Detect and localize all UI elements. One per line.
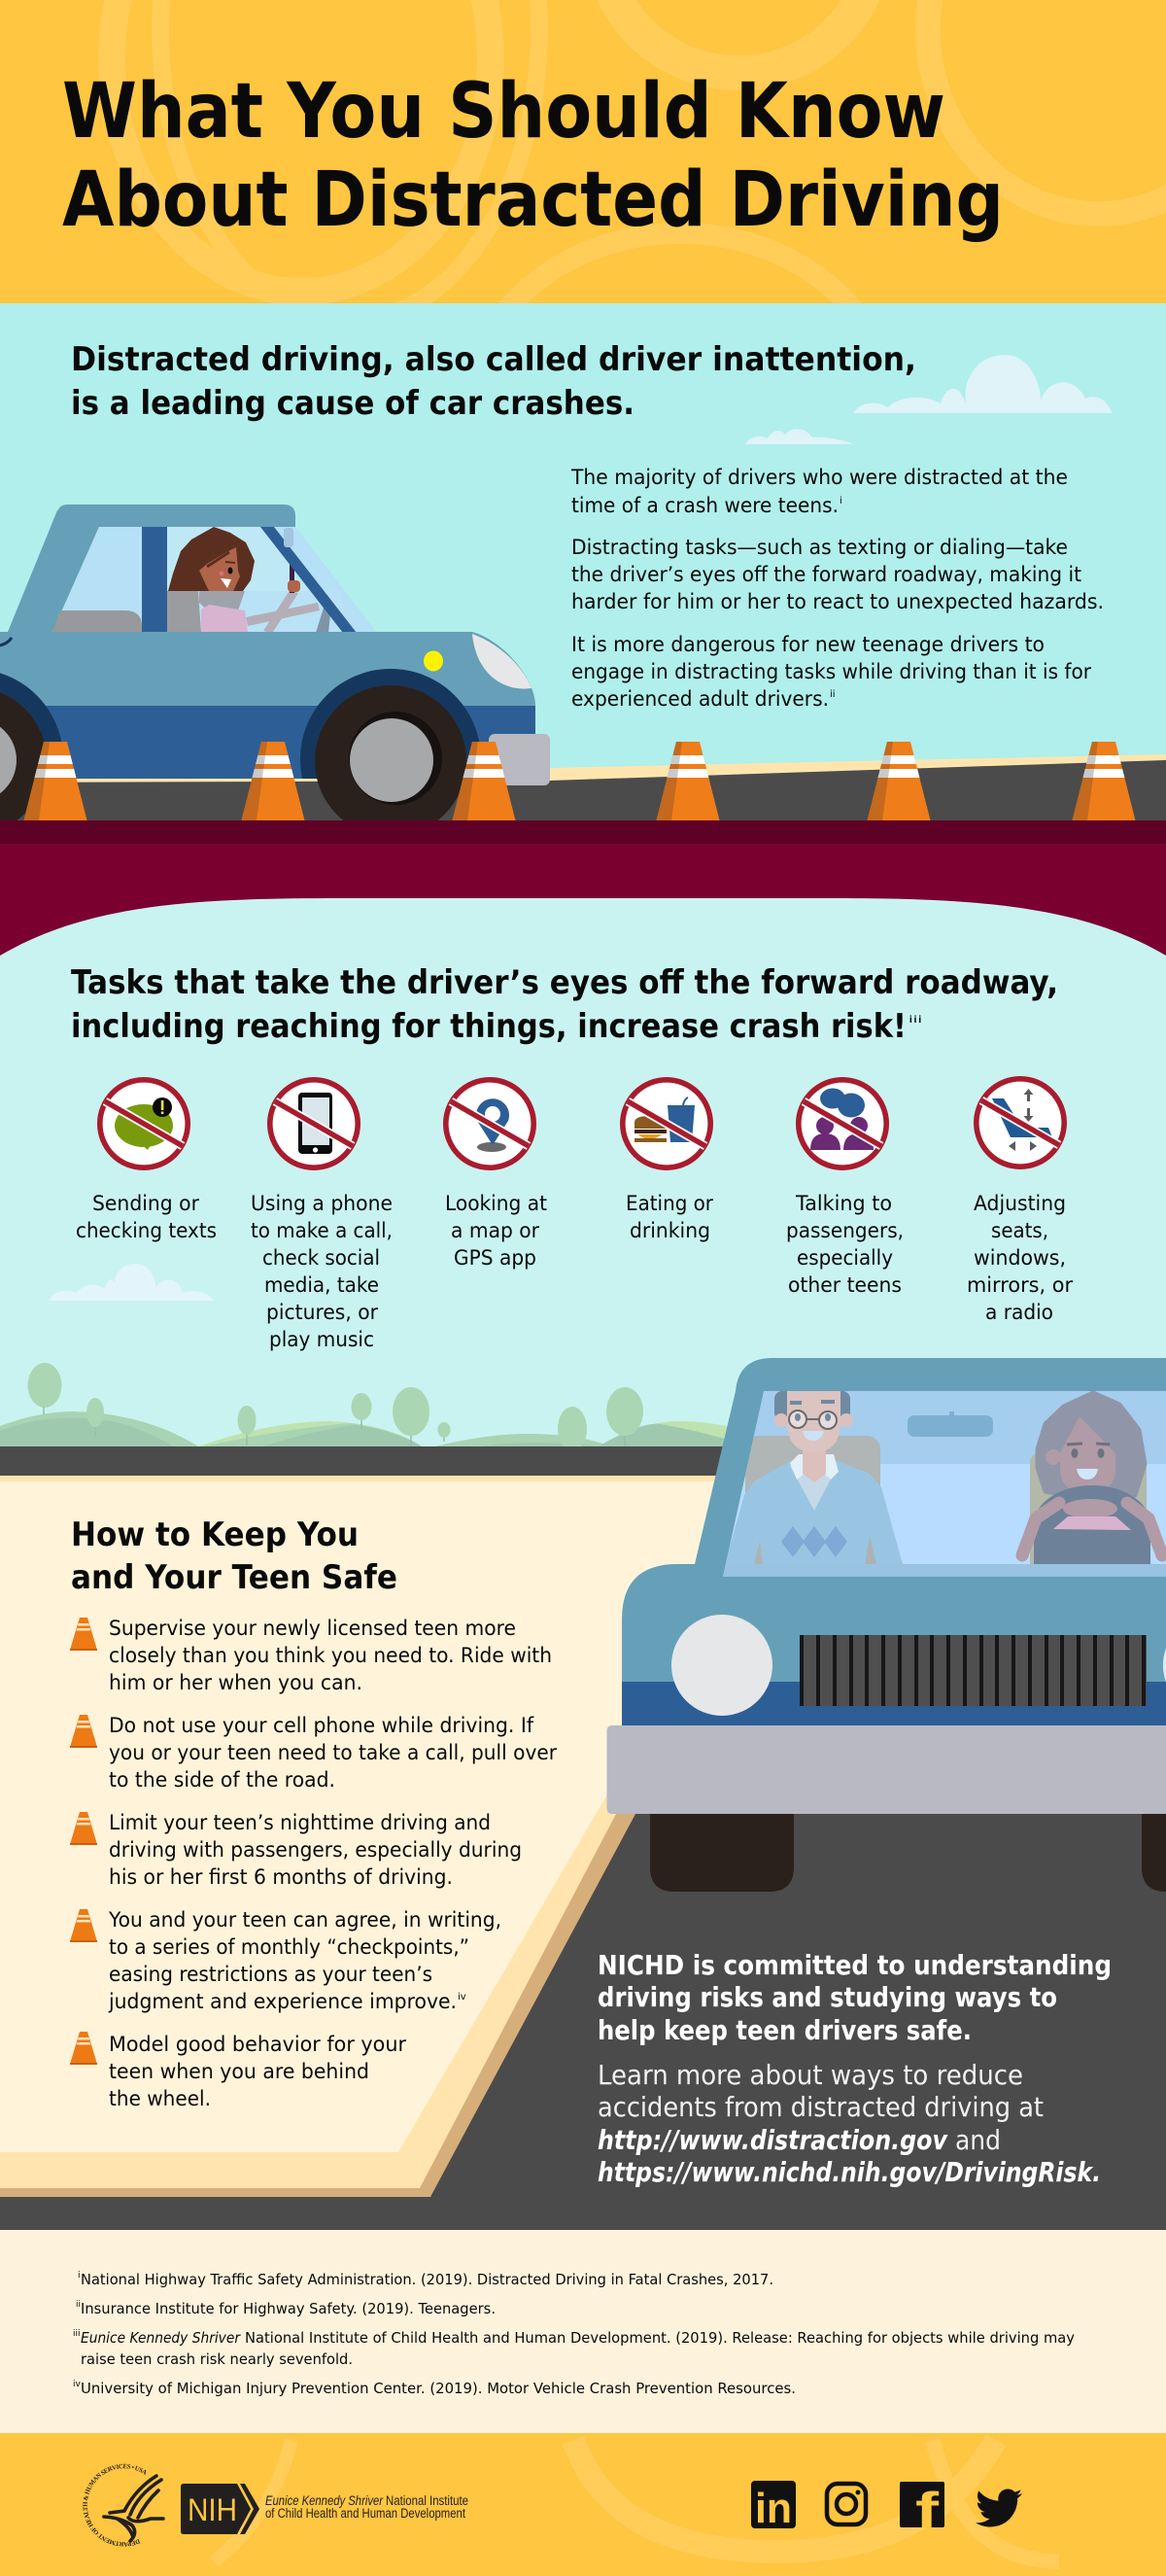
windows [52, 527, 377, 633]
bullet 1: closely than you think you need to. Ride with [109, 1644, 552, 1667]
label: adjusting: mirrors, or [967, 1273, 1073, 1297]
label: eating: Eating or [626, 1192, 713, 1215]
label: adjusting [967, 1192, 1073, 1324]
bullet 4: to a series of monthly “checkpoints,” [109, 1935, 469, 1959]
panel: references: University of Michigan Injury Prevention Center. (2019). Motor Vehicle Crash Prevention Resources. [81, 2380, 796, 2397]
intro text block: Distracting tasks—such as texting or dialing—take [571, 536, 1068, 559]
intro heading: is a leading cause of car crashes. [71, 384, 634, 423]
NICHD commitment text: accidents from distracted driving at [598, 2091, 1044, 2123]
label: phone: check social [262, 1246, 380, 1270]
NICHD commitment text [598, 1949, 1112, 2188]
intro text block: experienced adult drivers. [571, 687, 829, 711]
car cabin [8, 505, 295, 632]
bullet 2: Do not use your cell phone while driving. If [109, 1714, 534, 1737]
road with shoulder [0, 754, 1166, 820]
door handle [0, 638, 12, 645]
intro text block: It is more dangerous for new teenage drivers to [571, 633, 1045, 656]
title [62, 68, 1004, 244]
intro text block: the driver’s eyes off the forward roadway, making it [571, 563, 1081, 586]
windshield with occupants [719, 1391, 1166, 1577]
icon: no phone [270, 1080, 358, 1167]
label: map: Looking at [445, 1192, 547, 1215]
indicator [424, 651, 443, 671]
label: talking: other teens [788, 1273, 902, 1297]
institute name: of Child Health and Human Development [265, 2506, 465, 2521]
wheel arches [0, 669, 480, 779]
cloud large [853, 355, 1112, 413]
label: phone [251, 1192, 393, 1351]
icon: no texting [100, 1080, 188, 1167]
icon: no adjusting [977, 1079, 1064, 1166]
NICHD commitment text: and [955, 2124, 1001, 2156]
car body [622, 1358, 1166, 1725]
intro heading [71, 340, 916, 423]
bullet 2: to the side of the road. [109, 1768, 335, 1792]
institute name: National Institute [386, 2493, 468, 2508]
label: talking [786, 1192, 904, 1297]
bullet 4: You and your teen can agree, in writing, [108, 1908, 501, 1932]
tasks heading [71, 963, 1058, 1046]
label: texts [76, 1192, 217, 1242]
label: eating: drinking [630, 1219, 710, 1242]
title: What You Should Know [62, 68, 945, 156]
intro text block: i [840, 496, 842, 506]
NIH logo [181, 2484, 259, 2534]
panel heading: and Your Teen Safe [71, 1558, 397, 1597]
label: adjusting: a radio [985, 1301, 1053, 1324]
NICHD commitment text: help keep teen drivers safe. [598, 2014, 972, 2046]
NICHD commitment text: Learn more about ways to reduce [598, 2059, 1023, 2091]
HHS seal: DEPARTMENT OF HEALTH & HUMAN SERVICES • USA [83, 2463, 146, 2547]
NIH logo: NIH [188, 2492, 237, 2527]
label: talking: especially [797, 1246, 893, 1270]
car body [0, 632, 535, 706]
tires [650, 1808, 1166, 1892]
label: map: GPS app [454, 1246, 536, 1270]
icon: no map app [446, 1080, 533, 1167]
title: About Distracted Driving [62, 157, 1004, 244]
panel: intro sky [0, 303, 1166, 820]
bullet 3 [70, 1811, 522, 1889]
trees [27, 1363, 643, 1451]
label: phone: pictures, or [266, 1301, 378, 1324]
intro text block: engage in distracting tasks while driving than it is for [571, 660, 1091, 683]
label: phone: media, take [264, 1273, 379, 1297]
label: adjusting: windows, [974, 1246, 1066, 1270]
icon: Facebook: f [915, 2483, 940, 2539]
front wheel [315, 685, 466, 820]
headlight right [1163, 1649, 1166, 1682]
panel: references [0, 2230, 1166, 2433]
intro text block: The majority of drivers who were distracted at the [570, 466, 1068, 489]
bullet 4: judgment and experience improve. [108, 1990, 457, 2013]
bullet 5: Model good behavior for your [109, 2033, 406, 2056]
label: talking: passengers, [786, 1219, 904, 1242]
bullet 2: you or your teen need to take a call, pull over [109, 1741, 557, 1764]
label: phone: to make a call, [251, 1219, 393, 1242]
landscape hills and trees [0, 1363, 738, 1451]
bullet 5: teen when you are behind [109, 2060, 369, 2083]
bullet 5: the wheel. [109, 2087, 211, 2110]
grille [800, 1635, 1147, 1706]
panel: references: i [78, 2271, 81, 2280]
tasks heading: iii [909, 1015, 922, 1026]
label: texts: checking texts [76, 1219, 217, 1242]
panel: tasks [0, 898, 1166, 1448]
bullet 1: Supervise your newly licensed teen more [109, 1617, 516, 1640]
maroon band [0, 820, 1166, 960]
panel: references: iv [73, 2380, 82, 2389]
teen driver [1022, 1393, 1162, 1575]
rear seat [52, 610, 142, 632]
institute name [265, 2493, 468, 2521]
label: map [445, 1192, 547, 1270]
icon: Instagram [827, 2484, 866, 2524]
panel: references: Eunice Kennedy Shriver [81, 2329, 241, 2347]
cloud small [745, 429, 853, 444]
panel: references: iii [73, 2329, 81, 2339]
intro text block: ii [830, 689, 836, 700]
intro text block: time of a crash were teens. [571, 494, 839, 517]
side view car with teen driver [0, 505, 550, 850]
bullet 3: driving with passengers, especially during [109, 1838, 522, 1862]
intro heading: Distracted driving, also called driver inattention, [71, 340, 916, 379]
bullet 4: iv [458, 1992, 466, 2002]
bumper [489, 734, 550, 785]
icon: LinkedIn: in [755, 2485, 792, 2532]
panel: how to keep safe [0, 1481, 758, 2197]
car pillars [142, 527, 357, 633]
rear wheel [0, 692, 45, 820]
intro text block: harder for him or her to react to unexpected hazards. [571, 590, 1104, 613]
panel: references: raise teen crash risk nearly sevenfold. [81, 2350, 353, 2368]
institute name: Eunice Kennedy Shriver [265, 2493, 383, 2508]
footer band [0, 2433, 1166, 2576]
panel heading: How to Keep You [71, 1515, 359, 1554]
label: map: a map or [451, 1219, 539, 1242]
driver [167, 527, 331, 633]
label: adjusting: Adjusting [974, 1192, 1066, 1215]
upper road strip [0, 1446, 758, 1481]
dark road area [0, 1653, 1166, 2230]
label: texts: Sending or [92, 1192, 199, 1215]
bullet 2 [70, 1714, 557, 1792]
headlight left [671, 1615, 772, 1716]
bumper [606, 1725, 1166, 1814]
icon: Twitter [976, 2489, 1022, 2527]
cloud [49, 1264, 214, 1301]
label: eating [626, 1192, 713, 1242]
icon: no eating [623, 1080, 710, 1167]
label: phone: Using a phone [251, 1192, 393, 1215]
bullet 4: easing restrictions as your teen’s [109, 1963, 432, 1986]
panel: references: ii [76, 2300, 81, 2310]
panel: references: National Highway Traffic Safety Administration. (2019). Distracted Driving in Fatal Crashes, 2017. [81, 2271, 773, 2288]
row of traffic cones [23, 742, 1135, 820]
mirror [908, 1415, 993, 1437]
panel: references: National Institute of Child Health and Human Development. (2019). Release: Reaching for objects while driving may [245, 2329, 1075, 2347]
bullet 3: his or her first 6 months of driving. [109, 1865, 453, 1889]
NICHD commitment text: http://www.distraction.gov [598, 2124, 948, 2156]
intro text block [570, 466, 1104, 711]
NICHD commitment text: NICHD is committed to understanding [598, 1949, 1112, 1981]
tasks heading: Tasks that take the driver’s eyes off the forward roadway, [71, 963, 1058, 1002]
front view car [606, 1358, 1166, 1892]
header banner [0, 0, 1166, 303]
tasks heading: including reaching for things, increase crash risk! [71, 1007, 907, 1046]
label: phone: play music [269, 1328, 374, 1351]
father [725, 1391, 903, 1572]
bullet 5 [70, 2032, 406, 2110]
headlight [472, 634, 532, 689]
label: adjusting: seats, [991, 1219, 1048, 1242]
icon: Facebook [900, 2482, 944, 2539]
panel: references: Insurance Institute for Highway Safety. (2019). Teenagers. [81, 2300, 496, 2317]
bullet 4 [70, 1908, 501, 2013]
bullet 3: Limit your teen’s nighttime driving and [109, 1811, 491, 1834]
bullet 1: him or her when you can. [109, 1671, 362, 1694]
NICHD commitment text: driving risks and studying ways to [598, 1981, 1057, 2013]
bullet 1 [70, 1617, 552, 1694]
label: talking: Talking to [795, 1192, 892, 1215]
panel heading [71, 1515, 397, 1597]
icon: no talking [799, 1080, 886, 1167]
